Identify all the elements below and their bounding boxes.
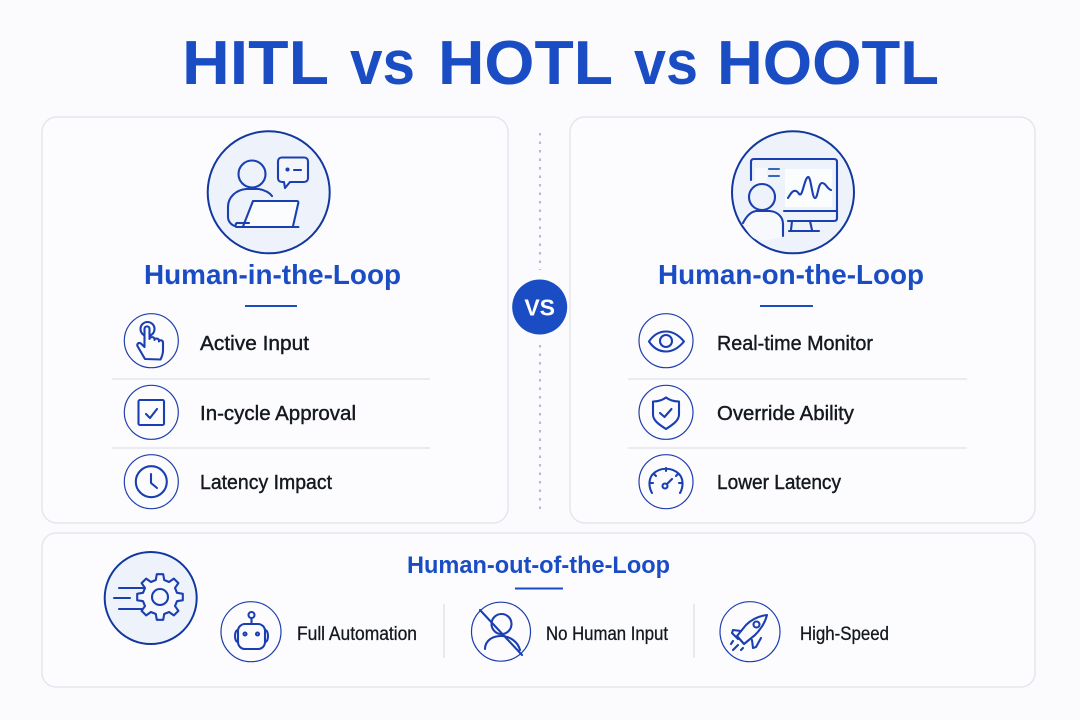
icon: gear with speed lines [105,552,197,644]
item: Full Automation [221,602,417,662]
icon: person with laptop and chat bubble [208,131,330,253]
panel: Human-in-the-Loop [42,117,508,523]
row: In-cycle Approval [124,385,356,439]
heading: Human-on-the-Loop: Human-on-the-Loop [658,259,924,290]
row: Real-time Monitor: Real-time Monitor [717,333,873,355]
vs divider with badge: VS [524,294,555,320]
title: vs [350,29,415,98]
heading: Human-out-of-the-Loop: Human-out-of-the-Loop [407,552,670,579]
item: High-Speed: High-Speed [800,624,889,645]
item: No Human Input: No Human Input [546,624,669,645]
panel: Human-out-of-the-Loop [42,533,1035,687]
row dividers [112,379,967,448]
item separators [444,604,694,658]
title: vs [634,29,698,98]
item: Full Automation: Full Automation [297,624,417,645]
title: HOOTL [717,29,939,98]
row: Real-time Monitor [639,314,873,368]
row: Active Input [124,314,309,368]
row: Lower Latency [639,455,841,509]
icon: person monitoring a dashboard [732,131,854,253]
row: In-cycle Approval: In-cycle Approval [200,403,356,425]
row: Latency Impact [124,455,332,509]
heading underline [515,588,563,590]
heading underline [245,305,297,307]
title: HOTL [438,29,613,98]
title: HITL [182,29,329,98]
panel: Human-on-the-Loop [570,117,1035,523]
vs divider with badge [512,133,567,509]
item: High-Speed [720,602,889,662]
row: Override Ability [639,385,854,439]
heading underline [760,305,813,307]
heading: Human-in-the-Loop: Human-in-the-Loop [144,259,401,290]
item: No Human Input [472,602,669,661]
row: Latency Impact: Latency Impact [200,472,332,494]
row: Lower Latency: Lower Latency [717,472,841,494]
row: Active Input: Active Input [200,333,309,355]
row: Override Ability: Override Ability [717,403,854,425]
